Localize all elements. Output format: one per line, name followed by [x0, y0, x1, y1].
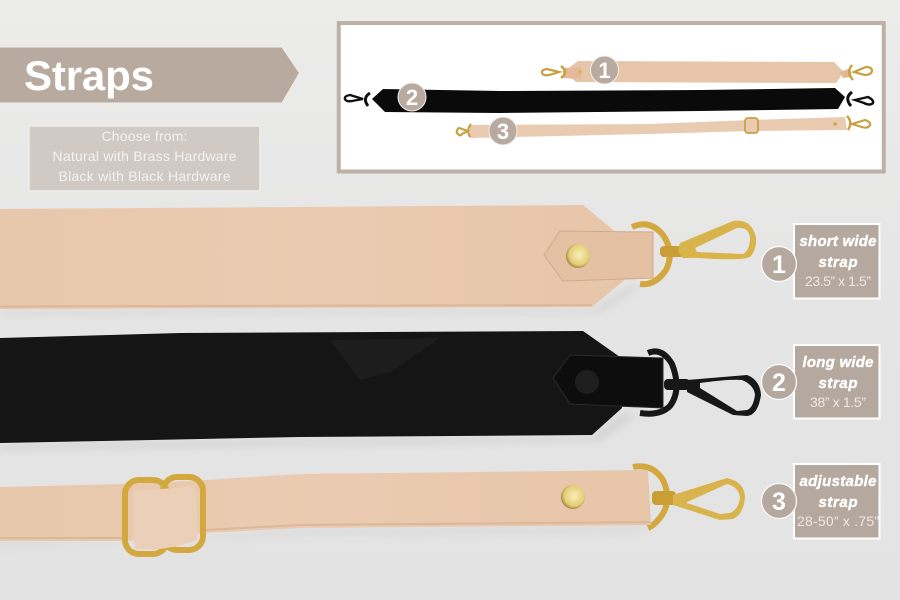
size label 3: 28-50” x .75”: [797, 513, 879, 529]
rivet: [561, 485, 585, 509]
colour options text box: Black with Black Hardware: [58, 168, 231, 184]
size label 2: 38” x 1.5”: [810, 394, 866, 410]
ring and clasp: [632, 221, 756, 284]
mini number badge 2: 2: [406, 85, 418, 110]
overview panel with three straps: [339, 23, 884, 172]
leather tab: [544, 231, 653, 281]
large strap 1: short wide natural: [0, 205, 756, 315]
ring and clasp: [640, 351, 761, 416]
large strap 2: long wide black: [0, 331, 761, 450]
mini number badge 3: 3: [497, 119, 509, 144]
size label 1: 23.5” x 1.5”: [805, 273, 871, 289]
colour options text box: Choose from:: [102, 128, 188, 144]
title banner: Straps: [24, 52, 154, 99]
size label 1: strap: [818, 254, 858, 271]
mini number badge 1: 1: [598, 58, 611, 83]
rivet: [575, 370, 599, 394]
mini number badge 1: [590, 56, 618, 84]
size label 2: long wide: [802, 354, 874, 371]
ring and clasp: [633, 466, 745, 528]
mini strap 1: [542, 61, 872, 83]
buckle: [125, 477, 203, 554]
size label 3: [762, 464, 880, 538]
mini strap 3: [457, 116, 870, 138]
title banner: [0, 47, 300, 103]
size label 3: adjustable: [800, 473, 876, 490]
size label 2: [762, 345, 880, 418]
size label 2: strap: [818, 375, 858, 392]
number badge 3: 3: [772, 488, 786, 516]
size label 1: short wide: [800, 233, 876, 250]
mini strap 2: [345, 88, 873, 113]
mini number badge 2: [398, 83, 426, 111]
large strap 3: adjustable natural: [0, 466, 745, 554]
number badge 1: 1: [772, 251, 786, 279]
size label 1: [762, 224, 880, 298]
mini number badge 3: [489, 117, 517, 145]
number badge 2: 2: [772, 369, 786, 397]
strap body: [0, 470, 651, 541]
colour options text box: [29, 126, 260, 191]
colour options text box: Natural with Brass Hardware: [52, 148, 237, 164]
leather tab: [553, 355, 663, 408]
size label 3: strap: [818, 494, 858, 511]
rivet: [566, 244, 590, 268]
